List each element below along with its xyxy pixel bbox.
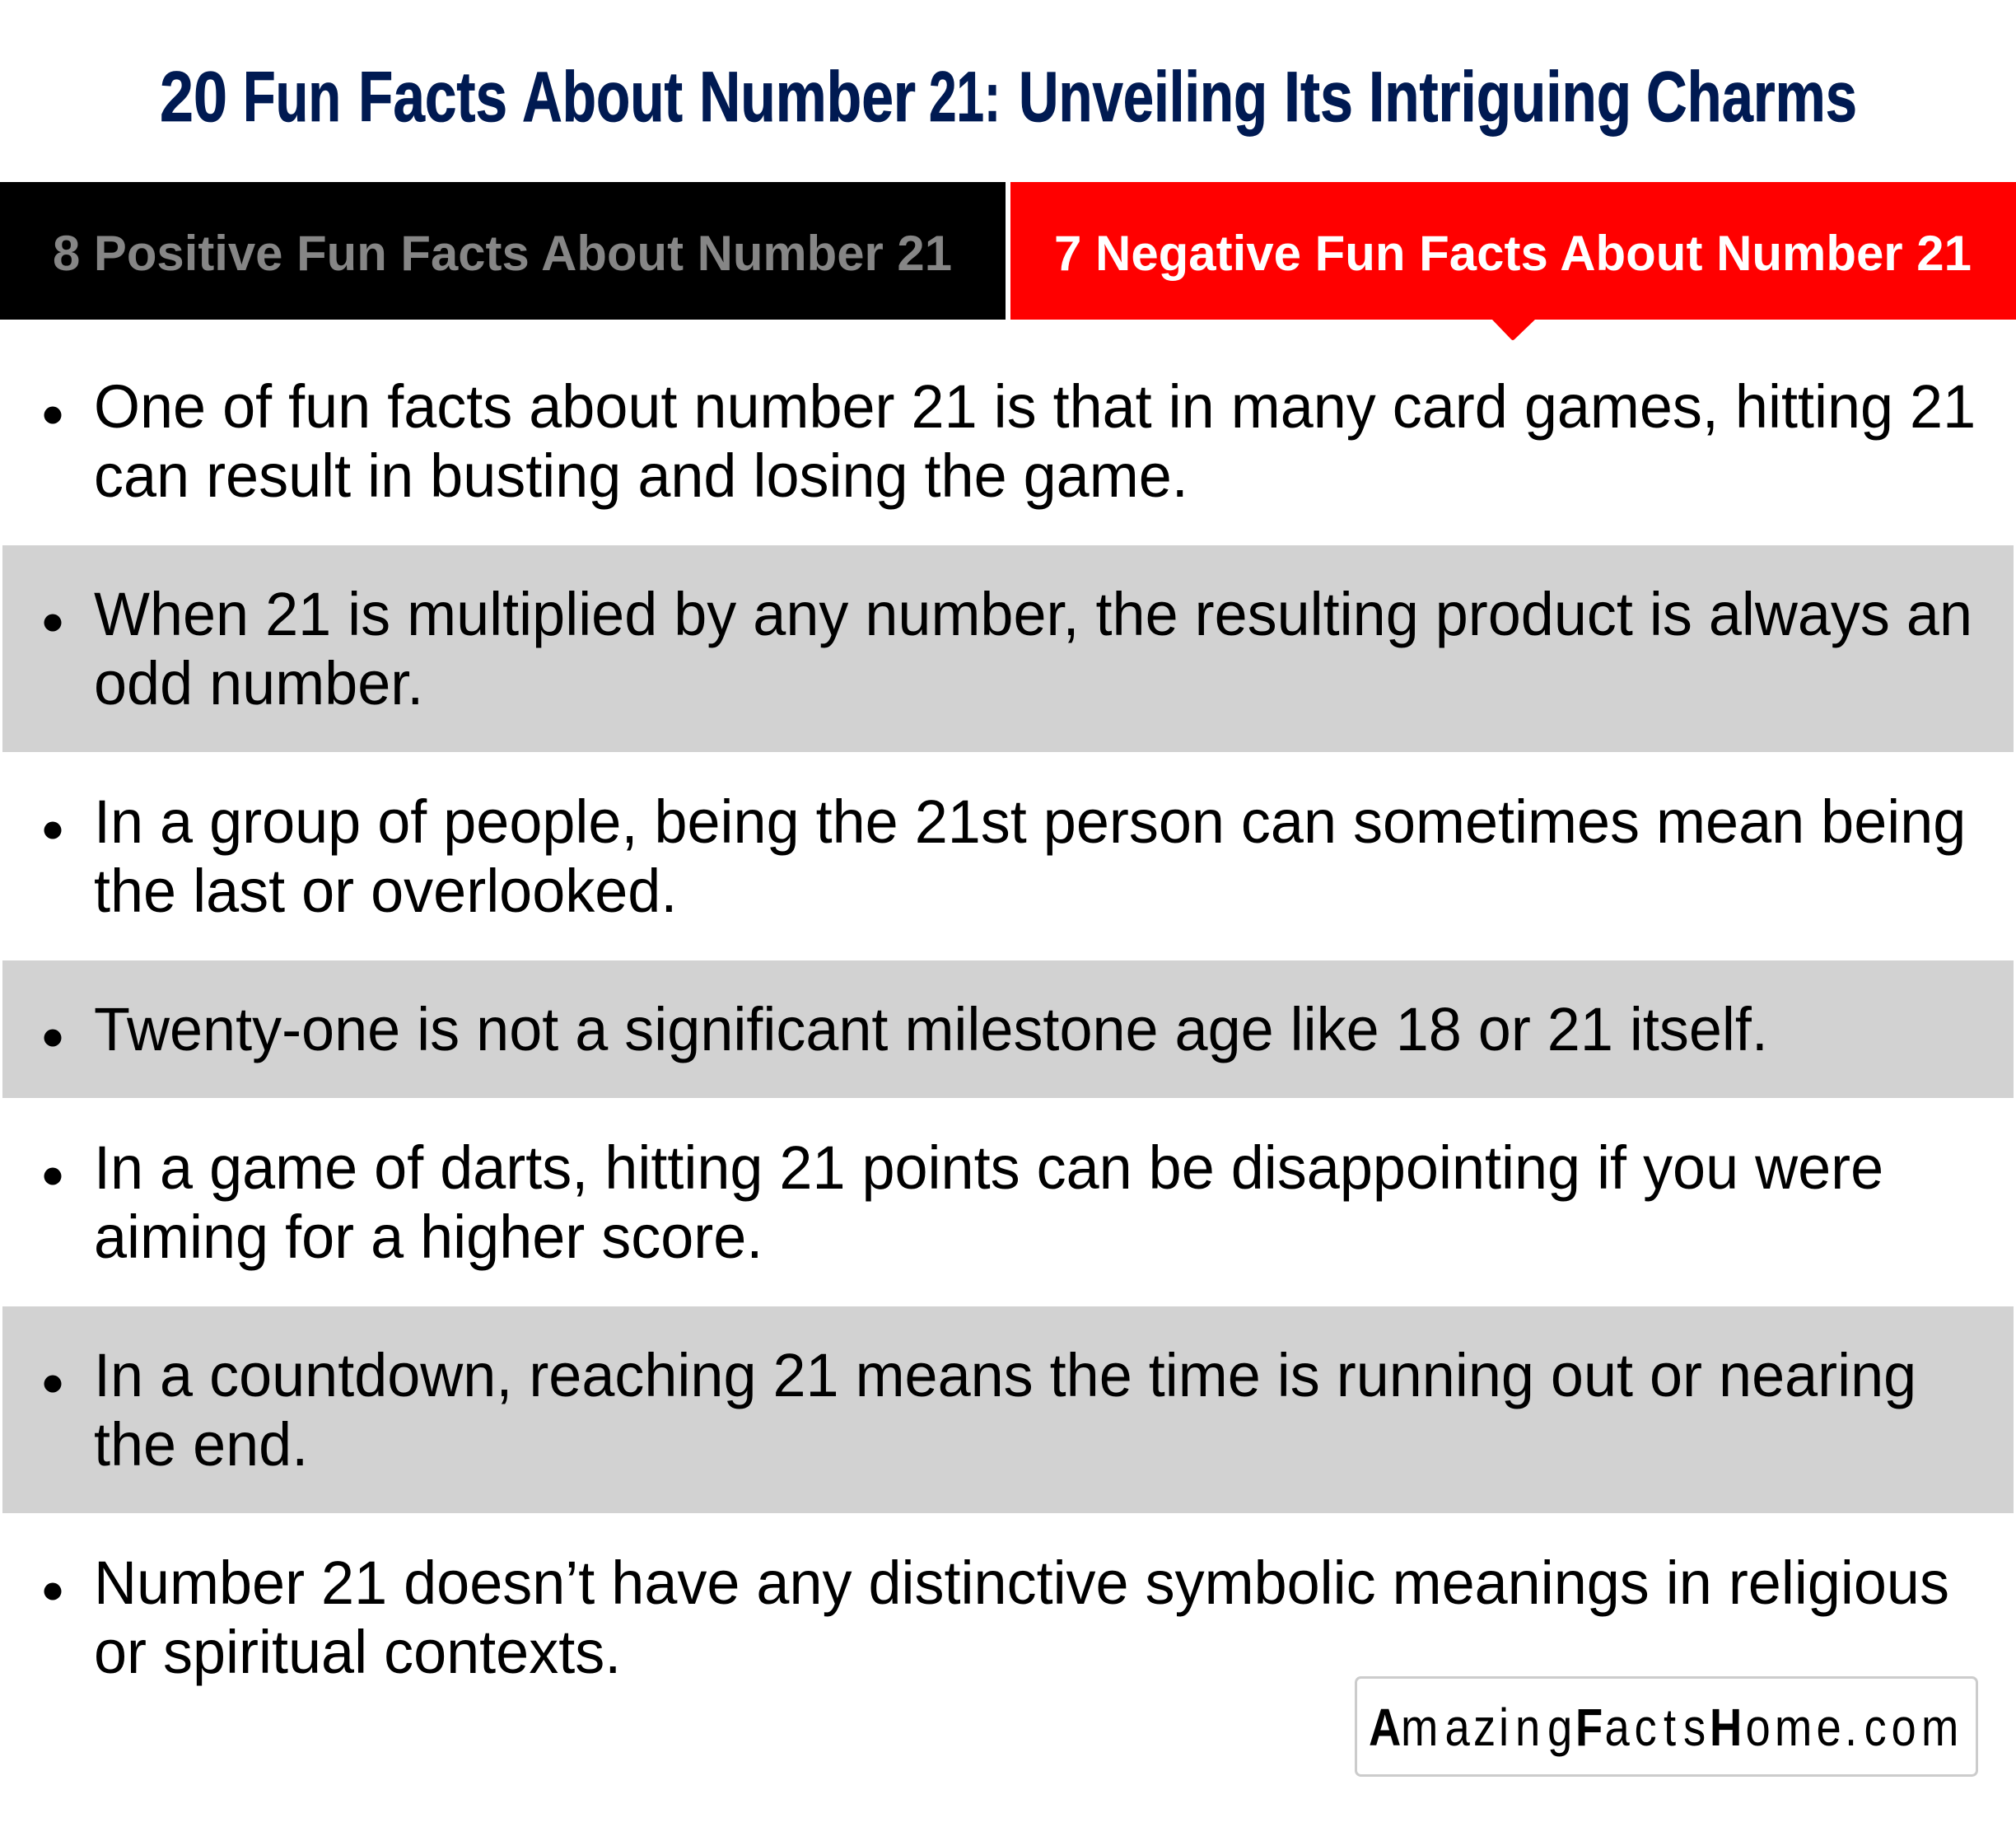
fact 6 <box>2 1306 2014 1513</box>
fact 1: One of fun facts about number 21 is that in many card games, hitting 21 <box>94 373 1976 441</box>
fact 1: can result in busting and losing the game. <box>94 442 1188 510</box>
fact 6: In a countdown, reaching 21 means the time is running out or nearing <box>94 1342 1916 1409</box>
fact 7: Number 21 doesn’t have any distinctive symbolic meanings in religious <box>94 1549 1949 1617</box>
tab: positive facts: 8 Positive Fun Facts About Number 21 <box>53 226 952 281</box>
fact 7: or spiritual contexts. <box>94 1619 621 1686</box>
tab: positive facts <box>0 182 1006 320</box>
fact 7 <box>44 1549 1949 1686</box>
title: Number <box>699 58 916 137</box>
fact 5: aiming for a higher score. <box>94 1203 763 1271</box>
title: 20 <box>160 58 227 137</box>
title: Facts <box>358 58 507 137</box>
watermark: AmazingFactsHome.com <box>1356 1677 1976 1776</box>
fact 1 <box>44 373 1976 510</box>
fact 5: In a game of darts, hitting 21 points can be disappointing if you were <box>94 1134 1883 1202</box>
fact 4: Twenty-one is not a significant milestone age like 18 or 21 itself. <box>94 996 1768 1063</box>
title: Intriguing <box>1369 58 1631 137</box>
title <box>160 58 1857 137</box>
fact 2: odd number. <box>94 650 423 717</box>
fact 2: When 21 is multiplied by any number, the resulting product is always an <box>94 581 1972 648</box>
fact 2 <box>2 545 2014 752</box>
tab: negative facts (active): 7 Negative Fun Facts About Number 21 <box>1054 226 1972 281</box>
fact 4 <box>2 960 2014 1098</box>
title: 21: <box>929 58 1001 137</box>
fact 3 <box>44 788 1966 925</box>
fact 5 <box>44 1134 1883 1271</box>
title: Charms <box>1646 58 1857 137</box>
title: About <box>522 58 683 137</box>
tab: negative facts (active) <box>1010 182 2016 340</box>
fact 3: the last or overlooked. <box>94 857 677 925</box>
fact 3: In a group of people, being the 21st person can sometimes mean being <box>94 788 1966 856</box>
title: Fun <box>243 58 341 137</box>
watermark: AmazingFactsHome.com: AmazingFactsHome.com <box>1369 1698 1958 1757</box>
fact 6: the end. <box>94 1411 308 1479</box>
title: Its <box>1284 58 1353 137</box>
title: Unveiling <box>1019 58 1267 137</box>
